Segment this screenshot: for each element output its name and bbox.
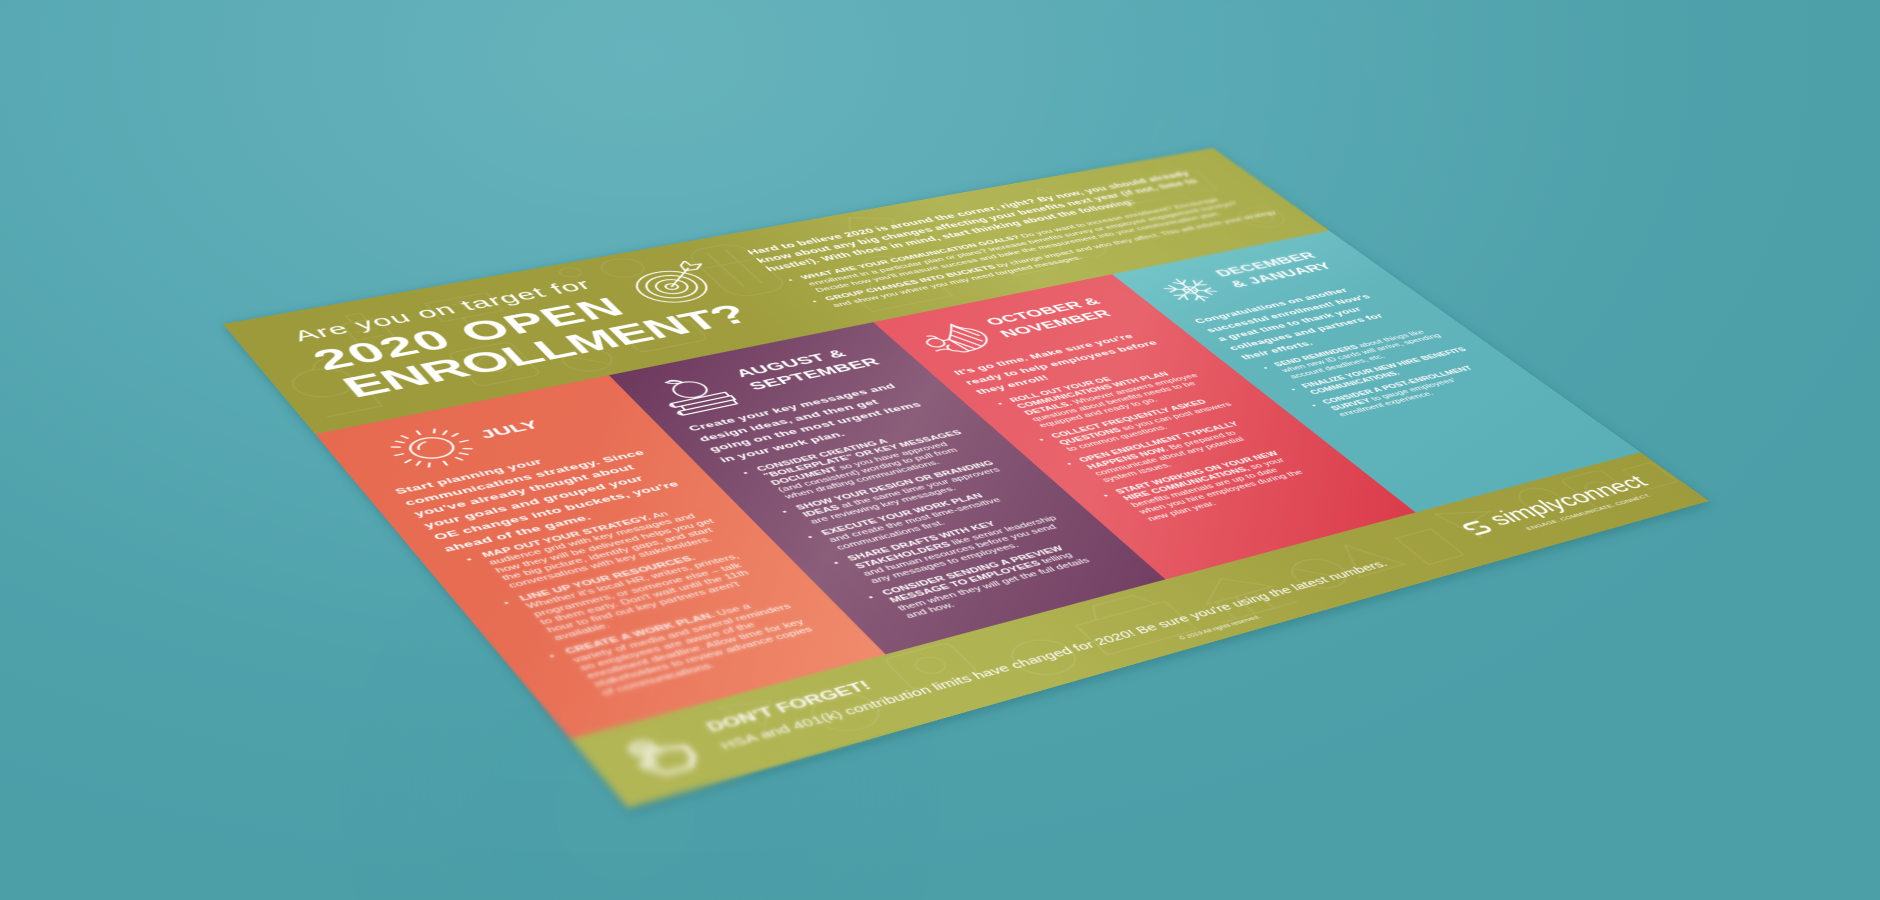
footer band <box>570 452 1709 808</box>
top header band <box>223 148 1329 434</box>
heading: AUGUST & <box>732 347 850 380</box>
lead paragraph: communications strategy. Since <box>402 448 647 507</box>
tip: DETAILS. Whoever answers employee <box>1023 372 1200 416</box>
tip: LINE UP YOUR RESOURCES. <box>518 554 698 603</box>
heading: NOVEMBER <box>996 308 1115 340</box>
icon: snowflake <box>1163 278 1218 302</box>
tip: CONSIDER A POST-ENROLLMENT <box>1321 365 1475 406</box>
copyright: © 2019 All rights reserved. <box>1178 615 1262 641</box>
tip: communications first. <box>834 519 947 551</box>
lead paragraph: OE changes into buckets, you're <box>431 479 681 542</box>
tip: stakeholders to review advance copies <box>592 626 815 689</box>
tip: START WORKING ON YOUR NEW <box>1113 450 1281 495</box>
tip: benefits materials are up to date <box>1129 467 1281 509</box>
tip <box>1113 439 1359 523</box>
tip: ROLL OUT YOUR OE <box>1008 376 1114 404</box>
tip <box>755 417 1014 501</box>
bullet: buckets: GROUP CHANGES INTO BUCKETS by change impact and who they affect. This will inform your strategy <box>823 210 1278 302</box>
tip: SEND REMINDERS about things like <box>1272 329 1427 368</box>
title main: 2020 OPEN <box>305 292 633 376</box>
tip: them when they will get the full details <box>896 557 1092 612</box>
tip: OPEN ENROLLMENT TYPICALLY <box>1077 421 1241 464</box>
tip: equipped and ready to go. <box>1037 397 1160 429</box>
tip: questions about benefits needs to be <box>1030 380 1198 423</box>
lead paragraph: you've already thought about <box>412 463 637 519</box>
tip: QUESTIONS so you can post answers <box>1057 401 1234 446</box>
tip: to them early. Don't wait until the 11th <box>538 569 751 626</box>
depth of field blur: near corner, soft <box>448 514 905 788</box>
heading: DECEMBER <box>1212 250 1320 279</box>
tip: system issues. <box>1100 462 1174 484</box>
heading <box>983 296 1115 340</box>
tip: when you hire employees during the <box>1137 469 1306 516</box>
tip: SURVEY to gauge employees' <box>1329 377 1459 412</box>
tip <box>1050 387 1276 454</box>
tip <box>518 536 810 643</box>
background pattern of faint line icons <box>720 462 1678 731</box>
title <box>289 277 759 404</box>
tip <box>1321 357 1528 419</box>
tip: (and consistent) wording to pull from <box>776 447 960 494</box>
lead paragraph: It's go time. Make sure you're <box>951 332 1136 377</box>
lead paragraph <box>392 448 681 553</box>
lead paragraph: Start planning your <box>392 457 545 496</box>
panel: October and November <box>873 274 1416 579</box>
icon: cornucopia <box>925 324 988 353</box>
tip <box>1008 353 1248 430</box>
tip: SHOW YOUR DESIGN OR BRANDING <box>794 460 996 512</box>
tip <box>820 476 1068 552</box>
tip <box>563 586 860 698</box>
tip: "BOILERPLATE" OR KEY MESSAGES <box>762 429 964 480</box>
lead paragraph <box>668 382 924 464</box>
intro text: know about any big changes affecting your benefits next year (if not, time to <box>754 177 1200 264</box>
heading: & JANUARY <box>1226 261 1336 290</box>
tip <box>1272 321 1477 380</box>
tip: of communications. <box>599 661 717 697</box>
tip: MAP OUT YOUR STRATEGY. An <box>480 510 671 559</box>
panel: December and January <box>1112 231 1640 512</box>
tip: programmers, or someone else – talk <box>531 561 744 618</box>
tip: so employees are aware of the <box>578 621 758 672</box>
tip: how they will be delivered helps you get <box>493 517 716 574</box>
icon: logo mark <box>1462 520 1492 536</box>
tip: DOCUMENT so you have approved <box>769 441 950 487</box>
lead paragraph: ahead of the game. <box>441 512 594 553</box>
tip: HIRE COMMUNICATIONS, so your <box>1121 457 1287 502</box>
tip: account deadlines, etc. <box>1288 353 1387 380</box>
heading: JULY <box>476 418 543 441</box>
lead paragraph: colleagues and partners for <box>1226 312 1386 352</box>
tip: and create the most time-sensitive <box>827 497 1004 544</box>
tip: CREATE A WORK PLAN. Use a <box>563 603 753 656</box>
tip: STAKEHOLDERS like senior leadership <box>853 514 1059 570</box>
don't forget callout <box>703 559 1391 752</box>
title main: ENROLLMENT? <box>335 300 759 404</box>
bullet: communication goals: Decide how you'll measure success and bake the measurement into your communication plan. <box>814 211 1223 293</box>
tip: CONSIDER CREATING A <box>755 438 890 473</box>
lead paragraph: Congratulations on another <box>1192 286 1350 325</box>
lead paragraph: a great time to thank your <box>1215 305 1364 343</box>
title kicker: Are you on target for <box>289 277 597 345</box>
tip <box>846 501 1104 586</box>
wordmark: simplyconnect <box>1483 472 1654 529</box>
panel: July <box>315 375 886 739</box>
bullet: communication goals: enrollment in a particular plan or plans? Increase benefits survey or employee engagement surveys? <box>807 201 1240 287</box>
lead paragraph: successful enrollment! Now's <box>1203 293 1373 334</box>
background pattern of faint line icons <box>292 188 1285 418</box>
tip <box>480 496 761 591</box>
depth of field blur: far corner <box>1060 146 1329 301</box>
icon: target with arrow <box>635 260 708 303</box>
tip: when new ID cards will arrive, spending <box>1280 333 1444 374</box>
tip: the big picture, identify gaps, and start <box>500 526 715 582</box>
tip: hour to find out key partners aren't <box>545 580 742 634</box>
tips list <box>668 382 1092 620</box>
lead paragraph: they enroll! <box>973 374 1052 396</box>
tip <box>1300 342 1498 396</box>
tips list <box>466 510 815 698</box>
tip <box>794 453 1041 526</box>
tip: communicate about any potential <box>1093 436 1247 477</box>
heading: OCTOBER & <box>983 296 1104 328</box>
panel: August and September <box>609 322 1165 654</box>
lead paragraph: Create your key messages and <box>686 382 898 433</box>
tip: CONSIDER SENDING A PREVIEW <box>880 545 1066 597</box>
tip: audience grid with key messages and <box>487 513 698 567</box>
tip: IDEAS at the same time your approvers <box>801 466 1003 519</box>
tip: are reviewing key messages. <box>808 485 959 526</box>
icon: hand pointer <box>624 736 701 780</box>
intro text: Hard to believe 2020 is around the corner, right? By now, you should already <box>745 170 1192 256</box>
tip: any messages to employees. <box>868 542 1022 585</box>
tip: new plan year. <box>1145 500 1219 523</box>
logo: simplyconnect <box>1462 472 1654 536</box>
bullet: communication goals: WHAT ARE YOUR COMMUNICATION GOALS? Do you want to increase enrollment? Encourage <box>799 197 1221 281</box>
tip: COMMUNICATIONS. <box>1308 370 1402 396</box>
tip: enrollment deadline. Allow time for key <box>585 618 807 681</box>
tip: enrollment experience. <box>1337 390 1436 418</box>
lead paragraph: design ideas, and then get <box>696 397 881 443</box>
lead paragraph: going on the most urgent items <box>707 400 924 454</box>
tip: and human resources before you send <box>861 523 1059 578</box>
tip: variety of media and several reminders <box>570 602 793 664</box>
tip: FINALIZE YOUR NEW HIRE BENEFITS <box>1300 347 1469 390</box>
tips list <box>1264 329 1475 418</box>
tip <box>1077 410 1313 485</box>
tagline: ENGAGE. COMMUNICATE. CONNECT. <box>1524 493 1653 531</box>
bullet: buckets: and show you where you may need targeted messages. <box>831 255 1085 309</box>
tips list <box>998 371 1306 523</box>
callout text: HSA and 401(k) contribution limits have changed for 2020! Be sure you're using the latest numbers. <box>718 559 1391 752</box>
heading <box>1212 250 1336 290</box>
tip: SHARE DRAFTS WITH KEY <box>846 520 998 563</box>
tip: conversations with key stakeholders. <box>507 535 714 590</box>
lead paragraph: ready to help employees before <box>962 339 1160 386</box>
flyer sheet in perspective <box>223 148 1709 808</box>
icon: sun <box>390 428 474 468</box>
icon: apple on books <box>664 380 739 416</box>
tip: to common questions. <box>1065 424 1170 453</box>
lead paragraph: their efforts. <box>1238 339 1315 361</box>
heading: SEPTEMBER <box>745 356 884 393</box>
lead paragraph <box>1192 286 1386 361</box>
tip: HAPPENS NOW. Be prepared to <box>1085 430 1239 471</box>
tip: COLLECT FREQUENTLY ASKED <box>1050 399 1209 440</box>
tip: COMMUNICATIONS WITH PLAN <box>1015 371 1171 410</box>
tip: and how. <box>903 601 957 620</box>
tip <box>880 532 1140 621</box>
tip: MESSAGE TO EMPLOYEES telling <box>888 552 1075 605</box>
depth of field blur: near corner, strong <box>548 690 734 812</box>
tip: Whether it's local HR, writers, printers, <box>524 553 742 611</box>
lead paragraph: in your work plan. <box>717 429 848 464</box>
tip: available. <box>552 622 613 643</box>
tip: EXECUTE YOUR WORK PLAN <box>820 492 985 537</box>
intro bullets <box>788 197 1278 309</box>
lead paragraph: your goals and grouped your <box>421 474 646 530</box>
intro text: hustle!). With those in mind, start thinking about the following: <box>763 198 1138 273</box>
callout heading: DON'T FORGET! <box>703 678 875 735</box>
tip: when drafting communications. <box>783 459 942 501</box>
